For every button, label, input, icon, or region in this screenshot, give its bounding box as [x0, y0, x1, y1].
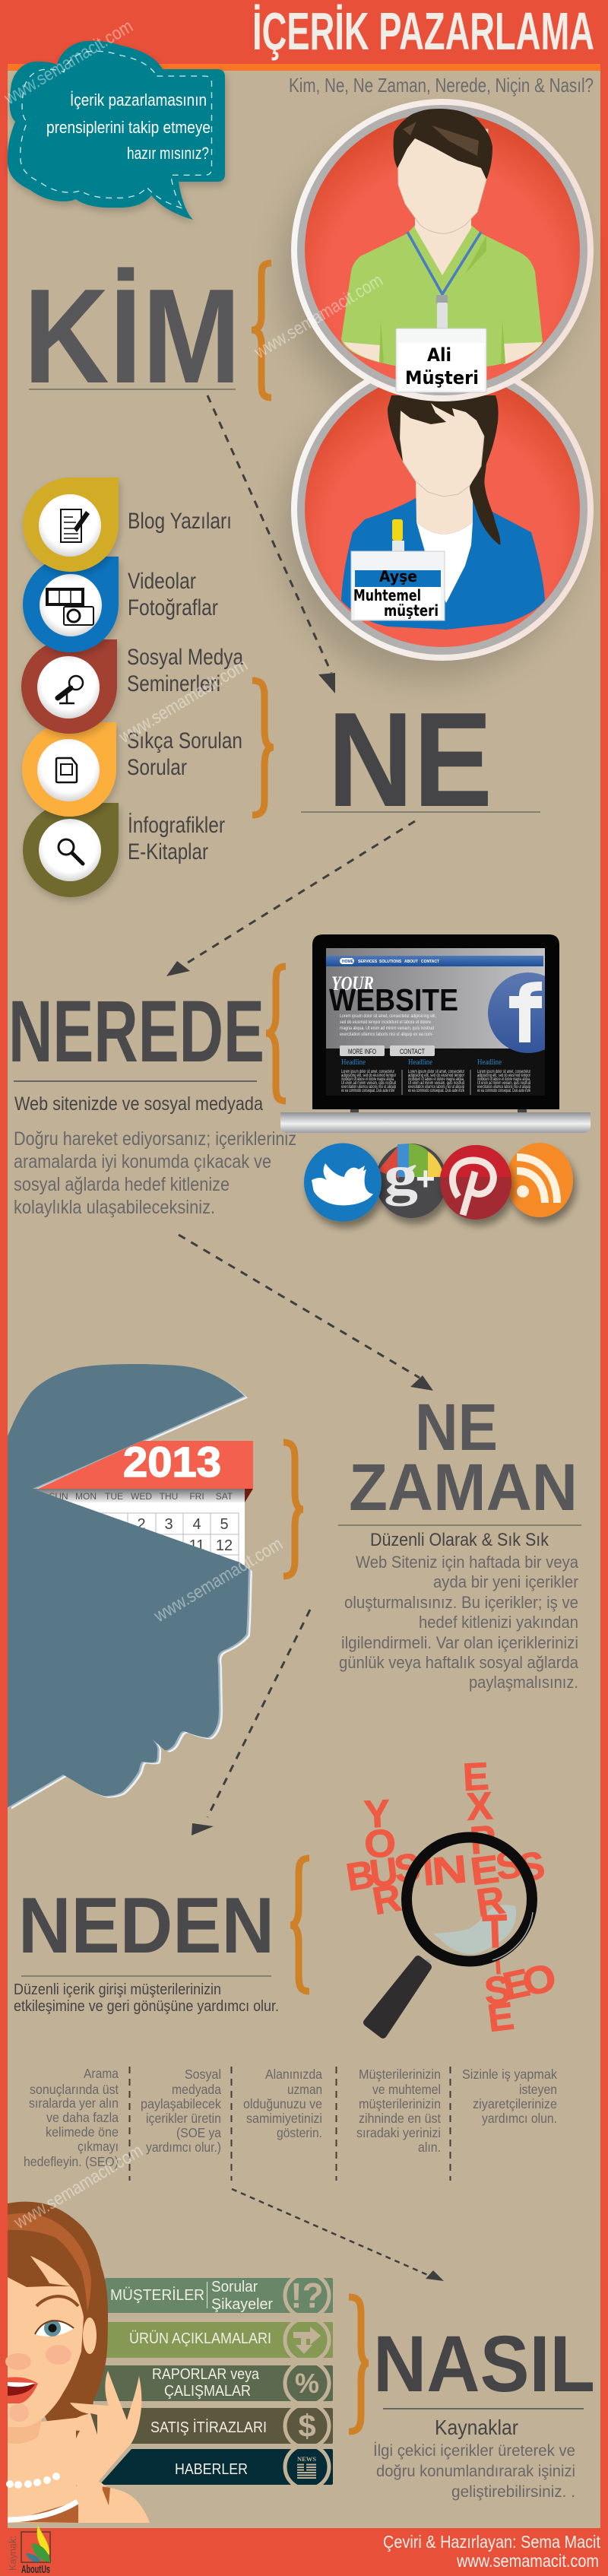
item: FAQ: [22, 722, 116, 817]
word art letters: [344, 1754, 560, 2040]
column 2: social sharing: yardımcı olur.): [146, 2140, 221, 2155]
label: videos and photos: Fotoğraflar: [128, 595, 218, 620]
label: infographics and e-books: [128, 813, 225, 864]
calendar weekdays: FRI: [189, 1491, 204, 1502]
text: NE ZAMAN body: hedef kitlenizi yakından: [419, 1613, 578, 1632]
dashed arrow: NEDEN to NASIL: [232, 2189, 444, 2281]
column 1: search: [24, 2066, 119, 2169]
website navigation: CONTACT: [421, 960, 439, 964]
brace: NE: [252, 680, 274, 815]
label: social media seminars: [127, 645, 243, 696]
word art letters: Y: [363, 1791, 391, 1836]
text: NEREDE body: sosyal ağlarda hedef kitlenize: [14, 1174, 230, 1195]
calendar weekdays: [49, 1491, 233, 1502]
text: NASIL body: doğru konumlandırarak işinizi: [376, 2463, 575, 2480]
column 2: social sharing: (SOE ya: [176, 2125, 221, 2140]
bar: product descriptions: [106, 2322, 333, 2358]
word art letters: T: [482, 1905, 508, 1958]
website columns: incididunt ut labore et dolore magna aliqua.: [408, 1077, 464, 1082]
bar: sales objections: $: [298, 2408, 316, 2444]
website headline: WEBSITE: [329, 982, 458, 1017]
website columns: [341, 1058, 530, 1095]
watermarks: www.semamacit.com: [0, 16, 137, 109]
brace: NEREDE: [266, 966, 286, 1101]
label: infographics and e-books: İnfografikler: [128, 813, 225, 838]
column 1: search: ve daha fazla: [46, 2110, 119, 2125]
column 5: visitors: Sizinle iş yapmak: [462, 2067, 557, 2082]
column 1: search: çıkmayı: [78, 2139, 119, 2154]
social icons: [304, 1143, 573, 1221]
portrait: Ali: [291, 99, 594, 401]
column 1: search: hedefleyin. (SEO): [24, 2154, 119, 2169]
column 4: top of mind: sıradaki yerinizi: [356, 2125, 441, 2140]
resource bars: [91, 2273, 333, 2489]
text: NASIL body: geliştirebilirsiniz. .: [451, 2483, 575, 2501]
column 3: expertise: samimiyetinizi: [246, 2111, 322, 2126]
column 4: top of mind: ve muhtemel: [372, 2082, 441, 2097]
bar: customers: MÜŞTERİLER: [110, 2286, 204, 2304]
heading: NASIL: NASIL: [373, 2320, 595, 2409]
column 3: expertise: [243, 2067, 322, 2140]
speech bubble: İçerik pazarlamasının: [70, 90, 207, 109]
text: NEREDE body: aramalarda iyi konumda çıkacak ve: [14, 1151, 271, 1172]
bar: reports: RAPORLAR veya: [152, 2366, 260, 2383]
website columns: Ut enim ad minim veniam, quis nostrud: [477, 1081, 530, 1086]
website navigation: ABOUT: [404, 960, 418, 964]
brace: NASIL: [349, 2297, 369, 2432]
column 2: social sharing: içerikler üretin: [146, 2111, 221, 2126]
label: infographics and e-books: E-Kitaplar: [128, 839, 208, 864]
calendar days: [137, 1516, 233, 1554]
icon: Google plus: g: [384, 1144, 418, 1207]
calendar days: 11: [189, 1537, 204, 1554]
word art letters: E: [462, 1754, 490, 1799]
shadow: portrait circles: [281, 125, 578, 680]
heading: NE ZAMAN: [338, 1391, 581, 1525]
column 3: expertise: olduğunuzu ve: [243, 2096, 322, 2111]
website columns: exercitation ullamco laboris nisi ut aliquip: [408, 1085, 464, 1090]
website buttons: MORE INFO: [348, 1048, 376, 1055]
calendar days: 5: [220, 1516, 229, 1533]
website columns: Headline: [477, 1058, 502, 1067]
text: NE ZAMAN body: paylaşmalısınız.: [469, 1673, 578, 1692]
source credit: Kaynak:: [7, 2536, 18, 2571]
column 5: visitors: isteyen: [519, 2082, 557, 2097]
website columns: Lorem ipsum dolor sit amet, consectetur: [408, 1070, 464, 1074]
bar: reports: %: [295, 2368, 319, 2399]
heading: NEDEN: NEDEN: [18, 1882, 274, 1970]
brace: NE ZAMAN: [283, 1442, 303, 1576]
bar: reports: ÇALIŞMALAR: [164, 2383, 251, 2400]
brace: NEDEN: [290, 1858, 309, 1991]
source logo: [21, 2525, 50, 2576]
bar: news: [101, 2449, 333, 2485]
bar: customers: Sorular: [211, 2279, 258, 2295]
text: NE ZAMAN body: [339, 1553, 579, 1692]
word art letters: P: [468, 1817, 498, 1862]
website columns: adipisicing elit, sed do eiusmod tempor: [341, 1074, 396, 1078]
head silhouette: [8, 1364, 249, 1807]
word art letters: S: [392, 1845, 423, 1891]
column 2: social sharing: [141, 2067, 221, 2155]
watermarks: www.semamacit.com: [10, 2140, 147, 2234]
brace: KİM: [252, 263, 271, 398]
website columns: exercitation ullamco laboris nisi ut aliquip: [341, 1085, 396, 1090]
text: NEREDE body: kolaylıkla ulaşabileceksiniz.: [14, 1197, 215, 1218]
word art letters: N: [430, 1848, 469, 1893]
website lorem text: [340, 1014, 436, 1037]
badge: Ali: Ali: [427, 344, 451, 366]
magnifier and word art: [344, 1754, 560, 2040]
bar: customers: !?: [290, 2276, 324, 2315]
word art letters: R: [369, 1875, 404, 1923]
website navigation: SOLUTIONS: [379, 960, 402, 964]
column 4: top of mind: zihninde en üst: [359, 2111, 441, 2126]
calendar days: 4: [192, 1516, 201, 1533]
facebook logo: [488, 972, 545, 1053]
website navigation: [340, 958, 439, 964]
column 2: social sharing: paylaşabilecek: [141, 2096, 221, 2111]
dashed arrow: NEREDE to NE ZAMAN: [179, 1235, 433, 1391]
calendar weekdays: THU: [160, 1491, 178, 1502]
calendar: [30, 1438, 253, 1565]
website columns: ex ea commodo consequat. Duis aute irure: [477, 1089, 530, 1093]
column 4: top of mind: müşterilerinizin: [359, 2096, 441, 2111]
text: NE ZAMAN body: ilgilendirmeli. Var olan içeriklerinizi: [341, 1633, 578, 1652]
word art letters: O: [518, 1956, 560, 2005]
word art letters: S: [516, 1843, 547, 1889]
bar: customers: Şikayeler: [211, 2296, 273, 2313]
word art letters: S: [493, 1842, 524, 1888]
calendar weekdays: TUE: [105, 1491, 123, 1502]
icon: Google plus: +: [416, 1160, 435, 1198]
source logo: AboutUs: [21, 2563, 50, 2576]
bar: reports: [93, 2365, 333, 2401]
website lorem text: exercitation ullamco laboris nisi ut aliquip ex ea com-: [340, 1032, 433, 1037]
website buttons: CONTACT: [400, 1048, 425, 1055]
badge: Ayşe: Muhtemel: [353, 586, 421, 604]
text: NASIL body: İlgi çekici içerikler üreterek ve: [373, 2442, 575, 2460]
word art letters: E: [499, 1960, 534, 2008]
bar: news: NEWS: [297, 2456, 317, 2463]
dashed arrow: NE to NEREDE: [166, 821, 415, 976]
column 1: search: sonuçlarında üst: [30, 2082, 119, 2097]
text: NEDEN intro: etkileşimine ve geri gönüşüne yardımcı olur.: [14, 1998, 279, 2015]
website columns: Headline: [341, 1058, 366, 1067]
bar: sales objections: SATIŞ İTİRAZLARI: [150, 2419, 267, 2436]
calendar year: 2013: [123, 1438, 221, 1486]
website columns: ex ea commodo consequat. Duis aute irure: [341, 1089, 394, 1093]
column 2: social sharing: Sosyal: [185, 2067, 221, 2082]
text: NASIL body: [373, 2442, 575, 2501]
watermarks: www.semamacit.com: [115, 655, 252, 748]
word art letters: O: [363, 1822, 397, 1867]
dashed arrow: NE ZAMAN to NEDEN: [192, 1610, 310, 1835]
heading: NE ZAMAN: NE: [415, 1391, 498, 1464]
column 4: top of mind: alın.: [418, 2140, 441, 2155]
calendar days: 3: [164, 1516, 173, 1533]
column 4: top of mind: [356, 2067, 441, 2155]
subheading: NASIL: Kaynaklar: [435, 2416, 518, 2439]
heading: NE ZAMAN: ZAMAN: [349, 1451, 578, 1524]
column 5: visitors: ziyaretçilerinize: [473, 2096, 557, 2111]
speech bubble: prensiplerini takip etmeye: [46, 118, 211, 137]
dashed arrow: KİM to NE: [207, 395, 335, 693]
text: NE ZAMAN body: oluşturmalısınız. Bu içerikler; iş ve: [344, 1593, 578, 1612]
column 1: search: sıralarda yer alın: [29, 2095, 119, 2111]
icon: Pinterest: [440, 1145, 511, 1220]
bar: sales objections: [122, 2408, 333, 2444]
website navigation: HOME: [342, 960, 354, 964]
laptop with website: [280, 934, 591, 1133]
calendar weekdays: SUN: [49, 1491, 68, 1502]
portrait: Ayşe: [291, 358, 594, 661]
text: NEDEN intro: [14, 1981, 279, 2015]
word art letters: I: [494, 1954, 502, 1979]
speech bubble: [8, 41, 225, 220]
item: blog: [23, 477, 119, 572]
website lorem text: magna aliqua. Ut enim ad minim veniam, quis nostrud: [340, 1026, 434, 1031]
heading: NE: NE: [328, 684, 492, 835]
heading: KİM: KİM: [24, 261, 241, 411]
website headline: YOUR: [331, 972, 374, 995]
watermarks: [0, 16, 387, 2234]
label: social media seminars: Seminerleri: [127, 671, 220, 696]
word art letters: E: [486, 1994, 516, 2040]
word art letters: R: [473, 1878, 508, 1924]
text: NEREDE body: Doğru hareket ediyorsanız; içerikleriniz: [14, 1128, 296, 1150]
badge: Ayşe: Ayşe: [379, 567, 417, 585]
footer credits: [383, 2532, 601, 2571]
text: NE ZAMAN body: ayda bir yeni içerikler: [433, 1572, 578, 1591]
label: videos and photos: [128, 569, 218, 620]
website columns: incididunt ut labore et dolore magna aliqua.: [477, 1077, 530, 1082]
website lorem text: Lorem ipsum dolor sit amet, consectetur adipisicing elit,: [340, 1014, 436, 1019]
word art letters: I: [421, 1850, 435, 1894]
badge: Ayşe: müşteri: [384, 601, 439, 620]
item: seminars: [21, 639, 117, 734]
website columns: ex ea commodo consequat. Duis aute irure: [408, 1089, 464, 1093]
word art letters: X: [466, 1784, 494, 1829]
label: blog: Blog Yazıları: [128, 509, 232, 534]
column 5: visitors: yardımcı olun.: [482, 2111, 557, 2126]
pearl necklace: [6, 2473, 60, 2489]
column 3: expertise: gösterin.: [277, 2125, 322, 2140]
text: NE ZAMAN body: günlük veya haftalık sosyal ağlarda: [339, 1653, 579, 1672]
calendar weekdays: SAT: [216, 1491, 233, 1502]
label: FAQ: [127, 728, 242, 780]
column 1: search: Arama: [84, 2066, 119, 2081]
website columns: Lorem ipsum dolor sit amet, consectetur: [341, 1070, 394, 1074]
website columns: Ut enim ad minim veniam, quis nostrud: [341, 1081, 396, 1086]
watermarks: www.semamacit.com: [250, 270, 387, 363]
column 3: expertise: Alanınızda: [265, 2067, 322, 2082]
label: FAQ: Sıkça Sorulan: [127, 728, 242, 753]
website columns: Headline: [408, 1058, 432, 1067]
hand: [61, 2371, 141, 2523]
column 5: visitors: [462, 2067, 557, 2126]
calendar weekdays: WED: [131, 1491, 152, 1502]
text: NE ZAMAN body: Web Siteniz için haftada bir veya: [356, 1553, 579, 1572]
header accent bar: [8, 64, 600, 71]
word art letters: S: [483, 1968, 512, 2013]
website columns: Ut enim ad minim veniam, quis nostrud: [408, 1081, 464, 1086]
badge: Ayşe: [351, 519, 445, 620]
label: FAQ: Sorular: [127, 755, 187, 780]
item: infographics: [23, 803, 119, 897]
website navigation: SERVICES: [358, 960, 378, 964]
icon: RSS: [506, 1143, 573, 1217]
speech bubble: hazır mısınız?: [127, 144, 209, 163]
word art letters: U: [367, 1849, 401, 1896]
icon: Google plus: [375, 1144, 447, 1218]
website columns: adipisicing elit, sed do eiusmod tempor: [408, 1074, 464, 1078]
website columns: Lorem ipsum dolor sit amet, consectetur: [477, 1070, 530, 1074]
subheading: NEREDE: Web sitenizde ve sosyal medyada: [14, 1093, 263, 1115]
list: content types: [21, 477, 243, 897]
word art letters: B: [344, 1852, 378, 1899]
heading: NEREDE: NEREDE: [8, 983, 264, 1080]
website columns: incididunt ut labore et dolore magna aliqua.: [341, 1077, 394, 1082]
item: videos: [23, 557, 119, 652]
label: social media seminars: Sosyal Medya: [127, 645, 243, 670]
badge: Ali: [396, 328, 486, 392]
column 2: social sharing: medyada: [172, 2082, 221, 2097]
website buttons: [340, 1045, 435, 1056]
calendar days: 12: [216, 1537, 233, 1554]
website columns: exercitation ullamco laboris nisi ut aliquip: [477, 1085, 530, 1090]
subheading: NE ZAMAN: Düzenli Olarak & Sık Sık: [370, 1530, 549, 1550]
word art letters: E: [468, 1847, 502, 1894]
column 4: top of mind: Müşterilerinizin: [359, 2067, 441, 2082]
column 1: search: kelimede öne: [46, 2124, 119, 2140]
bar: product descriptions: ÜRÜN AÇIKLAMALARI: [129, 2330, 271, 2347]
website columns: adipisicing elit, sed do eiusmod tempor: [477, 1074, 530, 1078]
bar: news: HABERLER: [175, 2461, 248, 2478]
label: videos and photos: Videolar: [128, 569, 196, 594]
woman illustration: [5, 2202, 150, 2523]
calendar days: 2: [137, 1516, 146, 1533]
text: NEREDE body: [14, 1128, 296, 1218]
badge: Ali: Müşteri: [405, 367, 479, 389]
laptop base: [280, 1109, 591, 1133]
watermarks: www.semamacit.com: [150, 1534, 287, 1627]
silhouette highlight: [9, 1365, 252, 1810]
text: NEDEN intro: Düzenli içerik girişi müşterilerinizin: [14, 1981, 221, 1998]
icon: Twitter: [304, 1144, 382, 1221]
calendar weekdays: MON: [75, 1491, 97, 1502]
website lorem text: sed do eiusmod tempor incididunt ut labore et dolore: [340, 1020, 431, 1025]
bar: customers: [105, 2278, 333, 2313]
column 3: expertise: uzman: [287, 2082, 322, 2097]
